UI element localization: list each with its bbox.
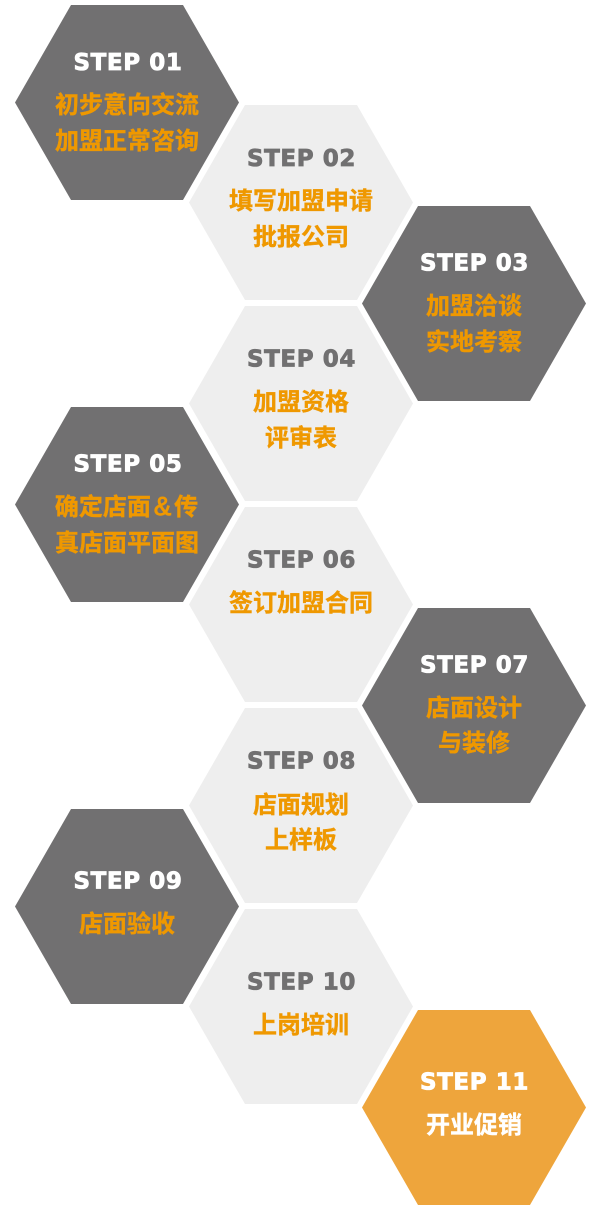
step 06: STEP 06 <box>247 548 356 574</box>
step 04: 评审表 <box>265 425 337 452</box>
step 10: STEP 10 <box>247 970 356 996</box>
step 02 <box>189 105 413 300</box>
step 05 <box>15 407 239 602</box>
step 06 <box>189 507 413 702</box>
step 02: 填写加盟申请 <box>229 188 373 215</box>
step 04 <box>189 306 413 501</box>
step 10 <box>189 909 413 1104</box>
step 03: 实地考察 <box>426 329 522 356</box>
step 05: 真店面平面图 <box>55 530 199 557</box>
step 04: 加盟资格 <box>253 389 349 416</box>
step 09: 店面验收 <box>79 910 175 938</box>
step 11 <box>362 1010 586 1205</box>
step 06: 签订加盟合同 <box>229 590 373 617</box>
step 04: STEP 04 <box>247 346 356 372</box>
step 05: 确定店面&传 <box>55 491 198 521</box>
step 02: STEP 02 <box>247 146 356 172</box>
step 03: STEP 03 <box>420 250 529 276</box>
step 11: 开业促销 <box>426 1112 522 1139</box>
step 05: STEP 05 <box>73 452 183 478</box>
step 07: 店面设计 <box>426 695 522 722</box>
step 09: STEP 09 <box>73 868 183 894</box>
step 08: 上样板 <box>265 827 337 854</box>
step 03 <box>362 206 586 401</box>
step 08: 店面规划 <box>253 792 349 819</box>
step 01: 加盟正常咨询 <box>55 128 199 155</box>
step 11: STEP 11 <box>420 1070 529 1096</box>
step 07 <box>362 608 586 803</box>
step 08 <box>189 708 413 903</box>
step 01: STEP 01 <box>73 50 183 76</box>
step 09 <box>15 809 239 1004</box>
step 07: 与装修 <box>438 730 510 757</box>
step 10: 上岗培训 <box>253 1012 349 1039</box>
step 02: 批报公司 <box>253 224 349 251</box>
step 01: 初步意向交流 <box>55 91 199 119</box>
step 03: 加盟洽谈 <box>426 293 522 320</box>
step 07: STEP 07 <box>420 652 529 678</box>
step 01 <box>15 5 239 200</box>
step 08: STEP 08 <box>247 748 356 774</box>
